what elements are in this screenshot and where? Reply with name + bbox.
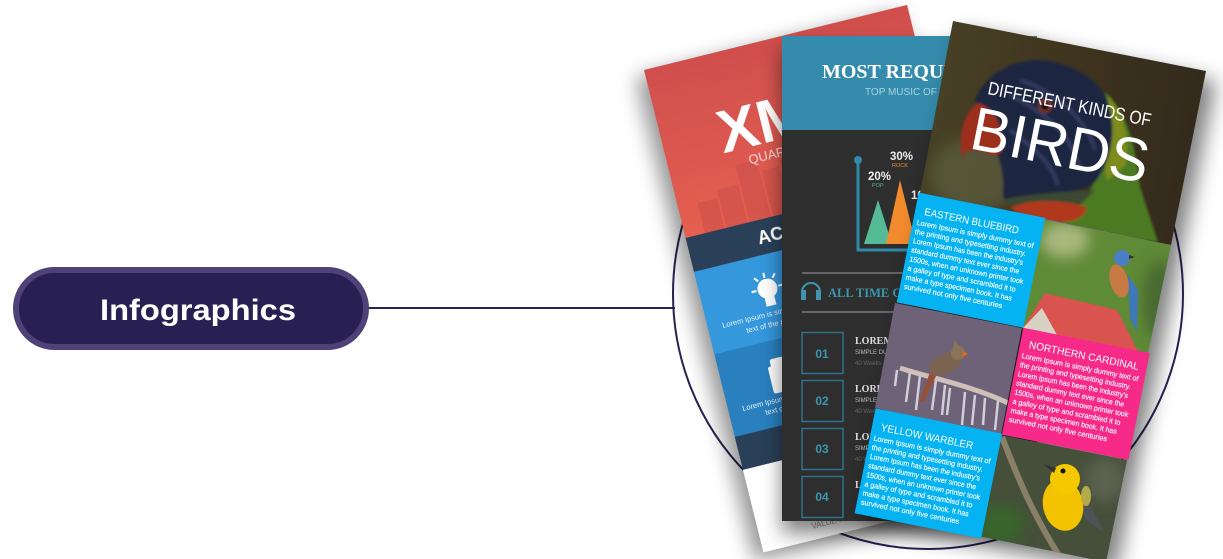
panel: eastern bluebird: survived not only five centuries (903, 282, 1003, 310)
triangle chart (854, 151, 950, 250)
value label: VALUE FOR MONEY (811, 504, 887, 531)
photo: parrot header (920, 21, 1206, 245)
panel: eastern bluebird: the printing and typesetting industry. (914, 227, 1027, 258)
panel: northern cardinal (1002, 328, 1150, 460)
panel: yellow warbler: make a type specimen book. It has (862, 488, 970, 518)
icon: bag (766, 355, 794, 394)
chart row 01: 40 Weeks (855, 361, 882, 367)
panel: northern cardinal: Lorem Ipsum has been the industry's (1017, 369, 1129, 400)
card: red achievements infographic: Lorem Ipsum is simply dummy (741, 380, 842, 413)
panel: eastern bluebird: make a type specimen book. It has (905, 273, 1013, 303)
card: red achievements infographic: text of the printing (764, 394, 824, 417)
card: different kinds of birds infographic (855, 10, 1220, 559)
chart row 02 (802, 380, 928, 422)
panel: northern cardinal: Lorem Ipsum is simply dummy text of (1021, 351, 1140, 383)
chart row 01: SIMPLE DUMMY (855, 350, 901, 356)
chart row 04: 04 (815, 490, 829, 504)
chart row 04: LOREM IPSUM (855, 480, 928, 491)
icon: light bulb (748, 269, 787, 309)
panel: northern cardinal: the printing and typesetting industry. (1019, 360, 1132, 391)
triangle chart: ROCK (892, 163, 908, 169)
icicles (895, 370, 998, 430)
circle outline (673, 39, 1183, 549)
band label: ACHIEVEMENTS (755, 195, 899, 248)
section heading: ALL TIME CHARTS (828, 286, 944, 300)
photo: yellow warbler on branch (982, 435, 1127, 559)
chart row 03: SIMPLE DUMMY (855, 446, 901, 452)
photo: eastern bluebird on red birdhouse (1022, 220, 1171, 353)
card: most requested music infographic (782, 36, 1037, 533)
subheading: TOP MUSIC OF 2017 (865, 87, 962, 98)
chart row 02: SIMPLE DUMMY (855, 398, 901, 404)
panel: northern cardinal: a galley of type and scrambled it to (1012, 397, 1121, 427)
panel: northern cardinal: survived not only five centuries (1008, 415, 1108, 443)
triangle chart: 30% (890, 151, 913, 163)
triangle chart: 10% (911, 190, 934, 202)
panel: northern cardinal: make a type specimen book. It has (1010, 406, 1118, 436)
triangle chart: 20% (868, 171, 891, 183)
panel: yellow warbler: standard dummy text ever since the (867, 461, 977, 491)
subheading: QUARTERLY (747, 134, 827, 167)
icon: headphones (802, 283, 820, 299)
panel: yellow warbler: Lorem Ipsum has been the industry's (869, 452, 981, 483)
panel: northern cardinal: 1500s, when an unknown printer took (1014, 388, 1129, 419)
panel: eastern bluebird: standard dummy text ever since the (911, 245, 1020, 276)
title: different kinds of: DIFFERENT KINDS OF (986, 77, 1153, 130)
chart row 02: 40 Weeks (855, 409, 882, 415)
pill button: Infographics (16, 270, 366, 347)
pill label: Infographics (100, 294, 296, 327)
chart row 04 (802, 476, 928, 518)
chart row 01 (802, 332, 928, 374)
panel: yellow warbler: a galley of type and scrambled it to (864, 479, 973, 510)
panel: eastern bluebird: Lorem Ipsum is simply dummy text of (916, 218, 1035, 250)
panel: yellow warbler: the printing and typesetting industry. (871, 443, 984, 474)
panel: eastern bluebird (897, 193, 1045, 328)
panel: yellow warbler: survived not only five centuries (860, 497, 960, 526)
panel: eastern bluebird: 1500s, when an unknown printer took (909, 254, 1024, 286)
chart row 03: LOREM IPSUM (855, 432, 928, 443)
chart row 03 (802, 428, 928, 470)
photo: northern cardinal on icy branch (875, 303, 1022, 434)
panel: yellow warbler (855, 408, 1002, 539)
chart row 01: 01 (815, 347, 829, 361)
card: red achievements infographic: text of the printing (745, 312, 805, 335)
bluebird (1106, 250, 1138, 332)
cardinal (919, 340, 968, 402)
chart row 02: LOREM IPSUM (855, 384, 928, 395)
panel: yellow warbler: 1500s, when an unknown printer took (866, 470, 981, 502)
card: red achievements infographic (636, 5, 1026, 559)
panel: northern cardinal: NORTHERN CARDINAL (1028, 339, 1140, 373)
panel: northern cardinal: standard dummy text ever since the (1015, 378, 1125, 409)
heading: MOST REQUESTED (822, 61, 1009, 83)
chart row 02: 02 (815, 394, 829, 408)
warbler (1042, 464, 1104, 532)
chart row 03: 03 (815, 442, 829, 456)
triangle chart: POP (872, 183, 884, 189)
chart row 03: 40 Weeks (855, 457, 882, 463)
chart row 01: LOREM IPSUM (855, 336, 928, 347)
title: birds: BIRDS (965, 94, 1155, 196)
caption text: Lorem Ipsum is simply dummy (721, 297, 822, 330)
panel: eastern bluebird: Lorem Ipsum has been the industry's (912, 236, 1024, 267)
panel: eastern bluebird: EASTERN BLUEBIRD (923, 206, 1020, 237)
heading XM: XMAS (710, 59, 895, 166)
panel: yellow warbler: Lorem Ipsum is simply dummy text of (873, 434, 992, 466)
panel: eastern bluebird: a galley of type and scrambled it to (907, 264, 1016, 294)
city skyline (691, 140, 849, 233)
connector line (366, 307, 675, 309)
panel: yellow warbler: YELLOW WARBLER (880, 422, 975, 452)
